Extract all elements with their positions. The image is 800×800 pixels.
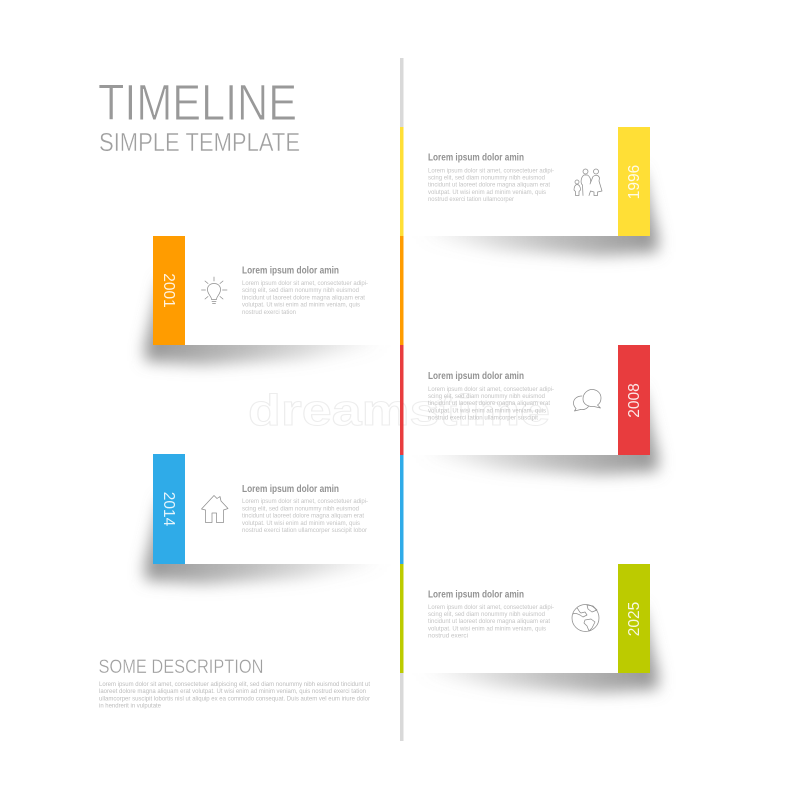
card 1996: Lorem ipsum dolor amin [428,152,524,164]
card 2001: nostrud exerci tation [242,309,296,316]
icon: house [202,496,228,522]
card 1996 [402,127,658,256]
watermark: dreamstime [248,386,550,435]
card 1996: 1996 [626,165,643,199]
card 1996: nostrud exerci tation ullamcorper [428,196,515,203]
card 2025: Lorem ipsum dolor amin [428,590,524,600]
card 2014: Lorem ipsum dolor amin [242,484,339,495]
description block: ullamcorper suscipit lobortis nisl ut aliquip ex ea commodo consequat. Duis autem vel eum iriure dolor [99,695,370,702]
card 2008: tincidunt ut laoreet dolore magna aliquam erat [428,400,550,407]
card 2001: volutpat. Ut wisi enim ad minim veniam, quis [242,302,360,309]
card 2008: nostrud exerci tation ullamcorper suscipit [428,414,538,422]
card 2014 [145,454,401,584]
card 2008: 2008 [626,383,643,418]
card 1996: tincidunt ut laoreet dolore magna aliquam erat [428,182,550,189]
card 2025: 2025 [626,602,643,636]
card 2008: volutpat. Ut wisi enim ad minim veniam, quis [428,407,546,414]
description block [98,657,370,710]
card 2001: Lorem ipsum dolor amin [242,266,339,276]
card 2014: nostrud exerci tation ullamcorper suscipit lobor [242,527,368,534]
card 2001: 2001 [160,273,177,308]
description block: Lorem ipsum dolor sit amet, consectetuer adipiscing elit, sed diam nonummy nibh euismod tincidunt ut [99,681,370,688]
card 2001: scing elit, sed diam nonummy nibh euismod [242,287,359,294]
card 2025: volutpat. Ut wisi enim ad minim veniam, quis [428,625,546,632]
card 1996: scing elit, sed diam nonummy nibh euismod [428,175,545,182]
card 2001: tincidunt ut laoreet dolore magna aliquam erat [242,294,365,302]
card 2014: 2014 [160,492,177,527]
description block: laoreet dolore magna aliquam erat volutpat. Ut wisi enim ad minim veniam, quis nostrud exerci tation [99,688,367,695]
card 2025: Lorem ipsum dolor sit amet, consectetuer adipi- [428,604,554,611]
timeline axis [400,58,404,741]
card 2008: scing elit, sed diam nonummy nibh euismod [428,393,545,400]
card 2008: Lorem ipsum dolor amin [428,371,524,382]
card 2008: Lorem ipsum dolor sit amet, consectetuer adipi- [428,386,554,393]
card 2025: tincidunt ut laoreet dolore magna aliquam erat [428,618,550,625]
card 2008 [248,345,658,475]
card 2025: nostrud exerci [428,632,468,640]
card 2014: tincidunt ut laoreet dolore magna aliquam erat [242,513,364,520]
card 2001: Lorem ipsum dolor sit amet, consectetuer adipi- [242,280,368,287]
card 2014: Lorem ipsum dolor sit amet, consectetuer adipi- [242,498,368,505]
description block: SOME DESCRIPTION [98,657,264,678]
card 2001 [145,236,401,365]
description block: in hendrerit in vulputate [99,703,162,710]
card 1996: Lorem ipsum dolor sit amet, consectetuer adipi- [428,168,554,174]
card 2025: scing elit, sed diam nonummy nibh euismod [428,611,545,618]
card 2014: volutpat. Ut wisi enim ad minim veniam, quis [242,520,360,527]
card 2025 [402,564,658,693]
title: TIMELINE [98,74,297,131]
card 2014: scing elit, sed diam nonummy nibh euismod [242,506,359,512]
title [98,74,300,157]
card 1996: volutpat. Ut wisi enim ad minim veniam, quis [428,189,546,196]
title: SIMPLE TEMPLATE [99,129,300,157]
